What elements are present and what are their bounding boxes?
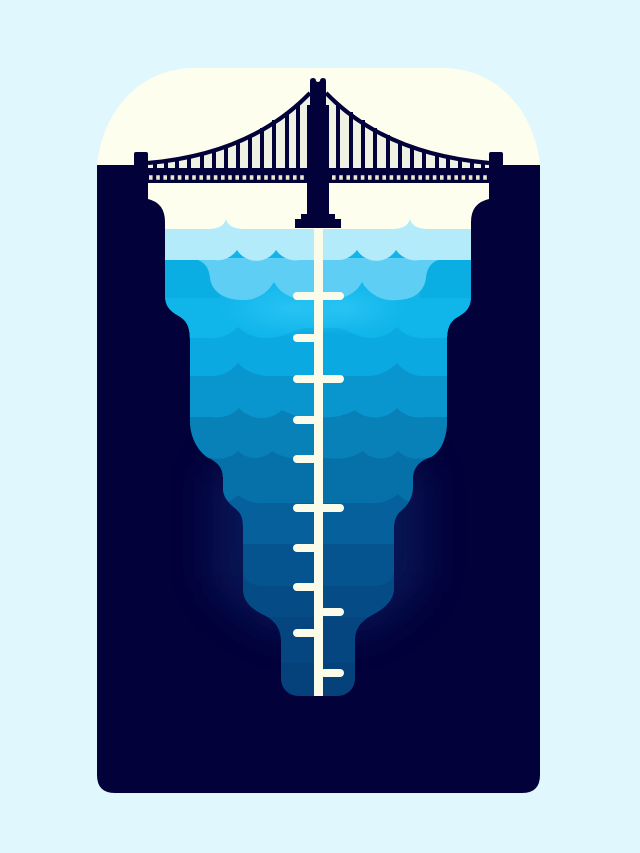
tick 6 [293, 504, 344, 512]
side shelf right [420, 258, 480, 298]
depth band 3 [165, 250, 471, 338]
depth band 8 [211, 458, 428, 544]
deck lattice right [332, 175, 488, 180]
surface water [160, 229, 480, 261]
glow around lower channel [212, 465, 424, 630]
tick 2 [293, 334, 317, 342]
depth band 10 [243, 590, 394, 617]
tint behind right hangers [326, 93, 489, 170]
hangers [155, 105, 483, 170]
tick 5 [293, 455, 317, 463]
deck lattice left [149, 175, 305, 180]
depth band 4 [165, 298, 471, 376]
left main cable [148, 93, 310, 163]
tick 4 [293, 416, 317, 424]
tick 8 [293, 583, 317, 591]
side shelf left [160, 258, 220, 298]
infographic: bridge above depth gauge [97, 68, 540, 793]
tick 3 [293, 375, 344, 383]
bridge silhouette [134, 78, 503, 228]
depth band 6 [190, 408, 447, 458]
tick 11 [320, 669, 344, 677]
central tower [295, 78, 341, 228]
right main cable [326, 93, 489, 163]
deck [148, 168, 489, 183]
tick 7 [293, 544, 317, 552]
left pier [134, 152, 148, 185]
sky panel [97, 68, 540, 170]
sky opening between cliffs [148, 165, 489, 232]
water channel [160, 229, 480, 699]
right pier [489, 152, 503, 185]
deepest water base [268, 617, 368, 696]
gauge pole [314, 229, 323, 696]
depth gauge [293, 229, 344, 696]
depth band 9 [243, 544, 394, 586]
depth band 7 [190, 426, 447, 503]
glow in upper water right [324, 291, 383, 326]
depth band 5 [165, 300, 470, 418]
light scalloped water [190, 258, 446, 300]
wave crests at surface [207, 219, 429, 229]
dark cliff mass [97, 165, 540, 793]
glow in upper water [246, 290, 314, 327]
tick 1 [293, 292, 344, 300]
tick 9 [320, 608, 344, 616]
tick 10 [293, 629, 317, 637]
tint behind left hangers [148, 93, 310, 170]
depth band 11 [254, 605, 386, 640]
